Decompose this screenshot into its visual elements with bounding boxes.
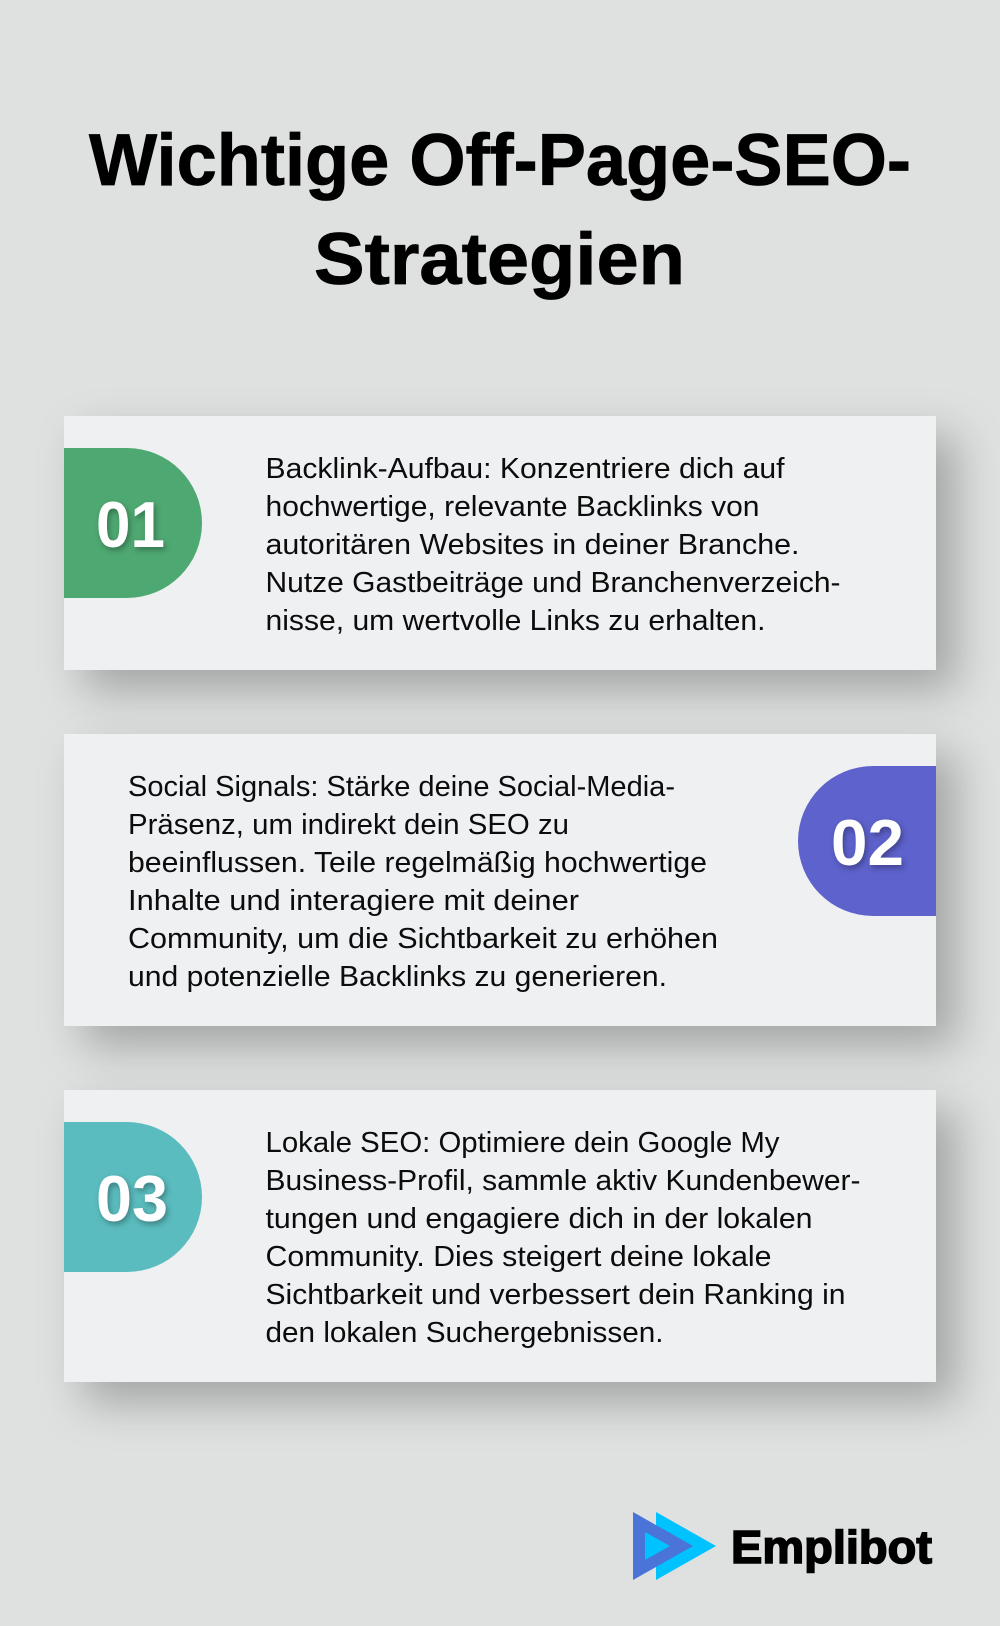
card 1 background [64, 416, 936, 670]
title: Strategien [314, 219, 685, 300]
badge 03 [64, 1122, 202, 1272]
card 3 background [64, 1090, 936, 1382]
text: social signals: und potenzielle Backlinks zu generieren. [128, 961, 667, 993]
text: backlink building: hochwertige, relevante Backlinks von [266, 491, 760, 523]
badge 01: 01 [96, 488, 165, 561]
badge 03: 03 [96, 1162, 168, 1235]
logo: Emplibot [633, 1512, 932, 1580]
text: social signals: Community, um die Sichtbarkeit zu erhöhen [128, 923, 718, 955]
text: backlink building: Nutze Gastbeiträge und Branchenverzeich- [266, 567, 840, 599]
text: local SEO: Business-Profil, sammle aktiv Kundenbewer- [266, 1165, 860, 1197]
text: social signals: Inhalte und interagiere mit deiner [128, 885, 579, 917]
text: local SEO: tungen und engagiere dich in der lokalen [266, 1203, 812, 1235]
text: social signals: Präsenz, um indirekt dein SEO zu [128, 809, 569, 841]
badge 02 [798, 766, 936, 916]
text: local SEO: Community. Dies steigert deine lokale [266, 1241, 772, 1273]
text: social signals: beeinflussen. Teile regelmäßig hochwertige [128, 847, 707, 879]
badge 02: 02 [831, 806, 904, 879]
panel: card 3 local SEO [64, 1090, 936, 1382]
text: local SEO: Sichtbarkeit und verbessert dein Ranking in [266, 1279, 846, 1311]
text: social signals: Social Signals: Stärke deine Social-Media- [128, 771, 675, 803]
card 2 background [64, 734, 936, 1026]
text: local SEO: den lokalen Suchergebnissen. [266, 1317, 664, 1349]
text: local SEO [266, 1127, 860, 1349]
text: backlink building: Backlink-Aufbau: Konzentriere dich auf [266, 453, 785, 485]
title: Wichtige Off-Page-SEO- [89, 120, 911, 201]
panel: card 1 backlinks [64, 416, 936, 670]
text: local SEO: Lokale SEO: Optimiere dein Google My [266, 1127, 780, 1159]
text: backlink building [266, 453, 840, 637]
title [89, 120, 911, 300]
badge 01 [64, 448, 202, 598]
text: backlink building: autoritären Websites in deiner Branche. [266, 529, 800, 561]
icon: play triangles [633, 1512, 716, 1580]
panel: card 2 social signals [64, 734, 936, 1026]
wordmark: Emplibot [731, 1521, 932, 1573]
text: backlink building: nisse, um wertvolle Links zu erhalten. [266, 605, 766, 637]
text: social signals [128, 771, 718, 993]
